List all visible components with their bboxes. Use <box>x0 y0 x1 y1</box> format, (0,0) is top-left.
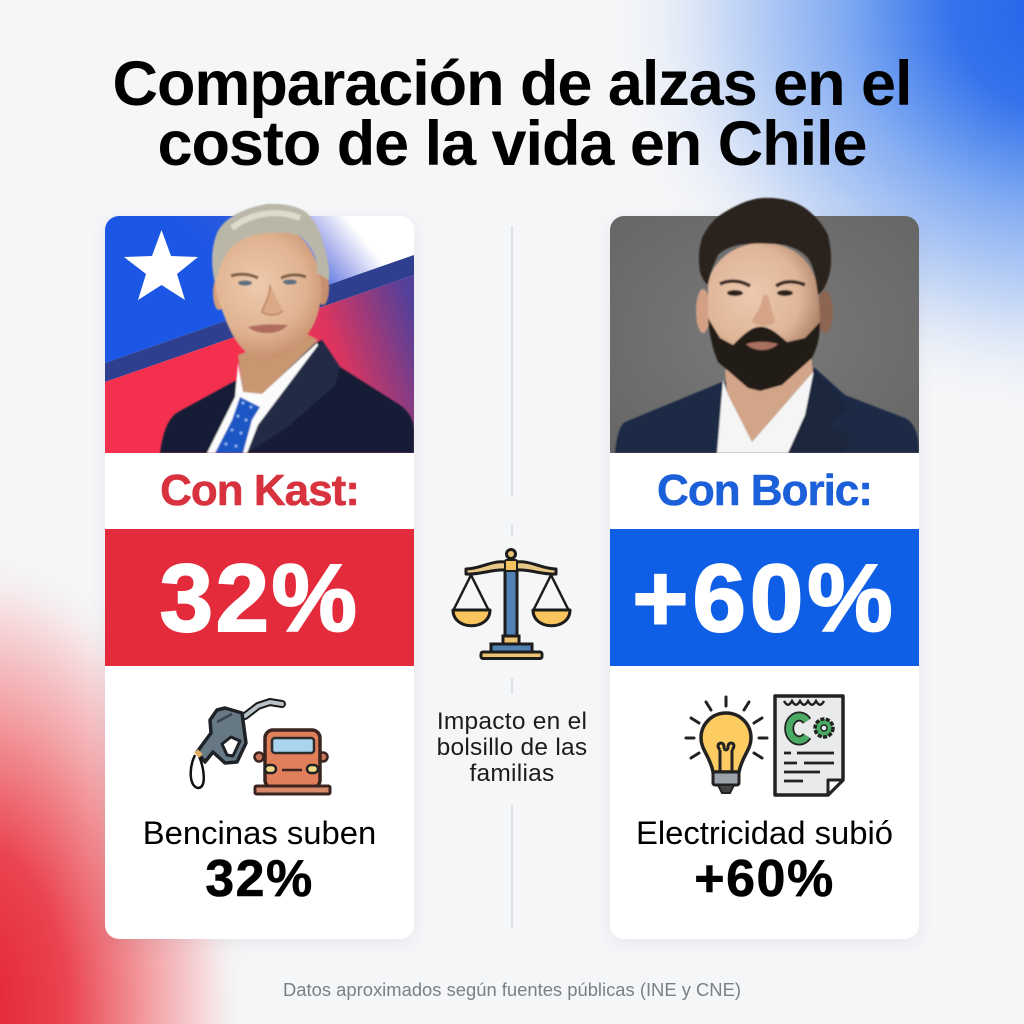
ears <box>212 281 222 311</box>
suit <box>160 340 414 453</box>
text: impact caption: familias <box>469 760 555 787</box>
text: impact caption <box>437 708 587 787</box>
text: impact caption: bolsillo de las <box>437 734 587 761</box>
eyes <box>238 280 252 286</box>
label: Con Boric: Con Boric: <box>657 466 872 515</box>
value: +60%: +60% <box>694 850 835 908</box>
icon: balance scale <box>452 548 572 660</box>
tie <box>215 397 260 453</box>
suit <box>615 368 919 453</box>
source note: Datos aproximados según fuentes públicas (INE y CNE) <box>283 979 741 1000</box>
text: Electricidad subió: Electricidad subió <box>636 814 893 851</box>
mouth <box>746 342 778 350</box>
text: impact caption: Impacto en el <box>437 708 587 735</box>
portrait: Boric <box>610 196 919 453</box>
nose <box>752 295 775 326</box>
portrait: Kast <box>105 203 414 453</box>
center divider <box>511 226 513 928</box>
icon: light bulb and bill <box>684 694 845 797</box>
eyebrows <box>720 281 805 286</box>
beard <box>708 318 820 391</box>
title: Comparación de alzas en el <box>112 49 912 119</box>
blue band: +60%: +60% <box>632 545 897 652</box>
mouth <box>248 324 288 333</box>
face <box>215 232 322 352</box>
nose <box>262 285 283 315</box>
neck <box>724 358 814 442</box>
ears <box>696 289 710 333</box>
blue band: +60% <box>610 529 919 666</box>
panel: Kast <box>105 216 414 939</box>
star <box>124 230 198 300</box>
value: 32%: 32% <box>205 850 314 908</box>
neck <box>238 330 318 395</box>
red band: 32%: 32% <box>160 545 359 652</box>
text: Bencinas suben: Bencinas suben <box>143 814 376 851</box>
title: costo de la vida en Chile <box>158 109 866 179</box>
eyes <box>727 290 743 296</box>
eyebrows <box>231 274 306 278</box>
icon: fuel nozzle and car <box>189 698 332 796</box>
hair <box>699 198 831 295</box>
shirt <box>207 343 322 453</box>
lapel <box>788 372 818 452</box>
label: Con Kast: Con Kast: <box>160 466 359 515</box>
title <box>112 49 912 179</box>
hair <box>212 204 329 283</box>
shirt <box>717 372 817 453</box>
red band: 32% <box>105 529 414 666</box>
lapel <box>247 340 340 453</box>
face <box>706 242 820 346</box>
panel: Boric <box>610 216 919 939</box>
